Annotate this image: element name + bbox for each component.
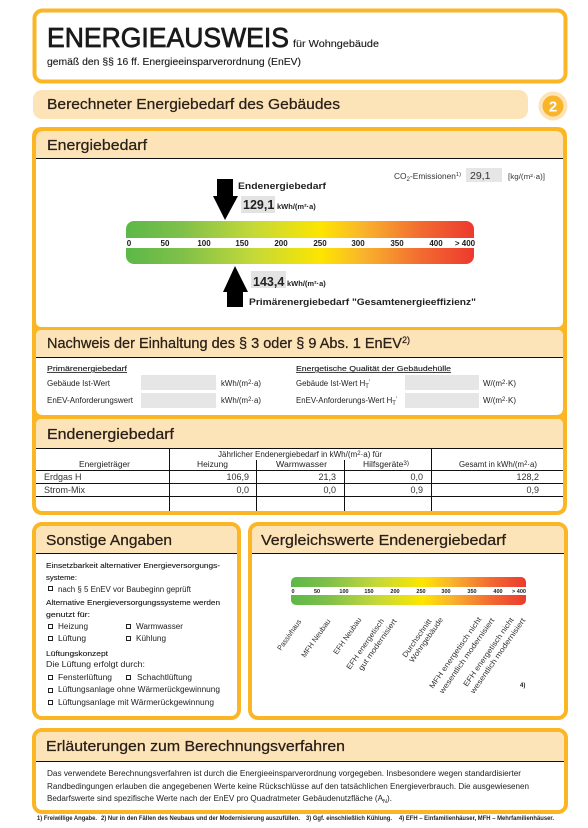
comparison scale bar: 100 (339, 589, 349, 595)
table header labels: Heizung (197, 460, 228, 469)
subtitle: building type: für Wohngebäude (293, 39, 379, 50)
table header labels: 3) (403, 461, 409, 467)
primary energy column: kWh/(m (221, 396, 249, 405)
compliance heading: 2) (402, 335, 410, 345)
table panel header (36, 419, 563, 448)
alternative systems usage: Lüftung (58, 634, 86, 643)
CO2 emissions: -Emissionen (410, 172, 456, 181)
table row: Erdgas H: 106,9 (226, 472, 249, 482)
scale bar: 350 (390, 239, 404, 248)
scale bar (126, 221, 476, 264)
CO2 emissions (394, 168, 545, 183)
footnotes: 2) Nur in den Fällen des Neubaus und der Modernisierung auszufüllen. (101, 815, 300, 822)
value: final energy: 129,1 (243, 198, 274, 212)
comparison scale bar: 350 (467, 589, 477, 595)
value: primary energy: kWh/(m²·a) (287, 279, 326, 288)
alternative systems feasibility: Einsetzbarkeit alternativer Energieversorgungs- (46, 561, 221, 570)
comparison scale bar (291, 577, 526, 605)
envelope quality column: ' (396, 397, 397, 403)
rotated building category labels (275, 615, 528, 696)
footnotes: 3) Ggf. einschließlich Kühlung. (306, 815, 392, 822)
comparison scale bar: > 400 (512, 589, 526, 595)
rotated building category labels: Passivhaus (275, 617, 303, 652)
rotated building category labels: Wohngebäude (407, 616, 445, 664)
table row: Strom-Mix: 0,9 (410, 485, 423, 495)
table header labels: 2 (524, 461, 528, 467)
ventilation concept: Lüftungsanlage mit Wärmerückgewinnung (58, 698, 214, 707)
envelope quality column: ·K) (505, 379, 516, 388)
envelope quality column: EnEV-Anforderungs-Wert H (296, 396, 394, 405)
energy panel header (36, 131, 563, 158)
alternative systems usage: Kühlung (136, 634, 166, 643)
scale bar: > 400 (455, 239, 476, 248)
rotated building category labels: gut modernisiert (356, 616, 399, 672)
rotated building category labels: Durchschnitt (400, 616, 434, 659)
scale bar: 300 (351, 239, 365, 248)
envelope quality column (296, 364, 516, 408)
table row: Erdgas H: Erdgas H (44, 472, 82, 482)
section heading text: Berechneter Energiebedarf des Gebäudes (47, 96, 340, 113)
table row: Erdgas H: 0,0 (410, 472, 423, 482)
ventilation concept: Fensterlüftung (58, 673, 112, 682)
envelope quality column: T (365, 384, 369, 390)
ventilation concept: Lüftungsanlage ohne Wärmerückgewinnung (58, 685, 220, 694)
comparison scale bar: 150 (364, 589, 374, 595)
CO2 emissions: CO (394, 172, 406, 181)
ventilation concept: Die Lüftung erfolgt durch: (46, 660, 145, 669)
envelope quality column: ·K) (505, 396, 516, 405)
table row: Strom-Mix: 0,0 (323, 485, 336, 495)
scale bar: 50 (161, 239, 170, 248)
primary energy column: ·a) (251, 396, 261, 405)
table row: Strom-Mix (44, 485, 539, 495)
scale bar: 0 (127, 239, 132, 248)
envelope quality column: Gebäude Ist-Wert H (296, 379, 367, 388)
table row: Strom-Mix: Strom-Mix (44, 485, 85, 495)
scale bar: 150 (235, 239, 249, 248)
rotated building category labels: wesentlich modernisiert (437, 615, 497, 696)
table row: Erdgas H: 21,3 (318, 472, 336, 482)
label: final energy: Endenergiebedarf (238, 181, 327, 192)
rotated building category labels: EFH energetisch (344, 617, 386, 671)
comparison scale bar: 400 (493, 589, 503, 595)
table grid (36, 448, 563, 511)
ventilation concept (46, 649, 220, 707)
title: ENERGIEAUSWEIS (47, 22, 289, 53)
label: primary energy: Primärenergiebedarf "Gesamtenergieeffizienz" (249, 297, 476, 308)
alternative systems usage (46, 598, 220, 643)
alternative systems feasibility: systeme: (46, 573, 77, 582)
value: final energy: kWh/(m²·a) (277, 202, 316, 211)
comparison scale bar: 250 (416, 589, 426, 595)
table row: Erdgas H (44, 472, 539, 482)
panel: final energy table (36, 419, 563, 511)
compliance header (36, 330, 563, 357)
value: final energy (241, 196, 316, 213)
icon: section number 2 (538, 92, 568, 120)
other info header (36, 526, 237, 553)
rotated building category labels: EFH Neubau (331, 616, 363, 656)
CO2 emissions: 2 (407, 177, 411, 183)
envelope quality column: ' (369, 380, 370, 386)
value: primary energy: 143,4 (253, 275, 284, 289)
envelope quality column: 2 (502, 397, 506, 403)
table header labels: ·a) für (361, 450, 382, 459)
primary energy column (47, 364, 261, 408)
envelope quality column: Energetische Qualität der Gebäudehülle (296, 364, 451, 373)
table row: Strom-Mix: 0,9 (526, 485, 539, 495)
primary energy column: Gebäude Ist-Wert (47, 379, 111, 388)
CO2 emissions: [kg/(m²·a)] (508, 172, 545, 181)
rotated building category labels: MFH energetisch nicht (427, 615, 484, 690)
table row: Erdgas H: 128,2 (516, 472, 539, 482)
alternative systems feasibility (46, 561, 221, 594)
other info heading: Sonstige Angaben (46, 532, 172, 549)
comparison heading: Vergleichswerte Endenergiebedarf (261, 532, 507, 549)
compliance heading: Nachweis der Einhaltung des § 3 oder § 9 Abs. 1 EnEV (47, 336, 402, 352)
energy panel heading: Energiebedarf (47, 137, 148, 154)
notes body text: ). (387, 794, 392, 803)
alternative systems usage: Alternative Energieversorgungssysteme werden (46, 598, 220, 607)
table header labels: Hilfsgeräte (363, 460, 401, 469)
footnotes (37, 815, 554, 822)
envelope quality column: W/(m (483, 396, 502, 405)
alternative systems usage: genutzt für: (46, 610, 90, 619)
table header labels: Energieträger (79, 460, 130, 469)
notes body text: Das verwendete Berechnungsverfahren ist durch die Energieeinsparverordnung vorgegeben. Insbesondere wegen standardisierter (47, 769, 521, 778)
table header labels: Gesamt in kWh/(m (459, 460, 525, 469)
section heading bar (33, 90, 528, 119)
ventilation concept: Schachtlüftung (137, 673, 192, 682)
icon: section number 2: 2 (549, 98, 557, 116)
notes body text: N (383, 799, 387, 805)
rotated building category labels: MFH Neubau (299, 617, 332, 659)
CO2 emissions: 29,1 (470, 170, 491, 182)
alternative systems usage: Warmwasser (136, 622, 183, 631)
table header labels: ·a) (527, 460, 537, 469)
footnotes: 1) Freiwillige Angabe. (37, 815, 97, 822)
table header labels: Jährlicher Endenergiebedarf in kWh/(m (218, 450, 357, 459)
value: primary energy (251, 271, 326, 289)
notes header (36, 732, 564, 761)
footnote marker 4: 4) (520, 683, 525, 689)
notes body text (47, 769, 529, 805)
panel: other information (34, 524, 239, 718)
primary energy column: 2 (248, 397, 252, 403)
arrow: primary energy (223, 266, 248, 307)
scale bar: 200 (274, 239, 288, 248)
envelope quality column: 2 (502, 380, 506, 386)
panel: title box (34, 10, 566, 82)
table header labels: 2 (357, 451, 361, 457)
table header labels (79, 450, 537, 469)
notes body text: Bedarfswerte sind spezifische Werte nach der EnEV pro Quadratmeter Gebäudenutzfläche (A (47, 794, 379, 803)
comparison scale bar: 0 (291, 589, 295, 595)
CO2 emissions: 1) (456, 172, 461, 178)
envelope quality column: T (392, 401, 396, 407)
table panel heading: Endenergiebedarf (47, 426, 175, 443)
alternative systems usage: Heizung (58, 622, 88, 631)
primary energy column: 2 (248, 380, 252, 386)
comparison scale bar: 200 (390, 589, 400, 595)
notes heading: Erläuterungen zum Berechnungsverfahren (46, 738, 345, 755)
table row: Strom-Mix: 0,0 (236, 485, 249, 495)
subtitle: legal basis: gemäß den §§ 16 ff. Energieeinsparverordnung (EnEV) (47, 57, 301, 68)
ventilation concept: Lüftungskonzept (46, 649, 109, 658)
panel: calculation notes (34, 730, 566, 812)
rotated building category labels: EFH energetisch nicht (461, 615, 516, 688)
scale bar: 400 (429, 239, 443, 248)
panel: main outer frame (32, 127, 567, 515)
primary energy column: kWh/(m (221, 379, 249, 388)
scale bar: 100 (197, 239, 211, 248)
panel: energy demand body (36, 158, 563, 327)
notes body text: Randbedingungen erlauben die angegebenen Werte keine Rückschlüsse auf den tatsächlichen Energieverbrauch. Die ausgewiesenen (47, 782, 529, 791)
primary energy column: EnEV-Anforderungswert (47, 396, 134, 405)
comparison scale bar: 300 (441, 589, 451, 595)
primary energy column: ·a) (251, 379, 261, 388)
footnotes: 4) EFH – Einfamilienhäuser, MFH – Mehrfamilienhäuser. (399, 815, 554, 822)
envelope quality column: W/(m (483, 379, 502, 388)
primary energy column: Primärenergiebedarf (47, 364, 128, 373)
alternative systems feasibility: nach § 5 EnEV vor Baubeginn geprüft (58, 585, 192, 594)
comparison header (252, 526, 564, 553)
arrow: final energy (213, 179, 238, 220)
comparison scale bar: 50 (314, 589, 320, 595)
table header labels: Warmwasser (276, 460, 327, 469)
panel: compliance proof (36, 330, 563, 415)
scale bar: 250 (313, 239, 327, 248)
panel: comparison values (250, 524, 566, 718)
rotated building category labels: wesentlich modernisiert (468, 615, 528, 696)
